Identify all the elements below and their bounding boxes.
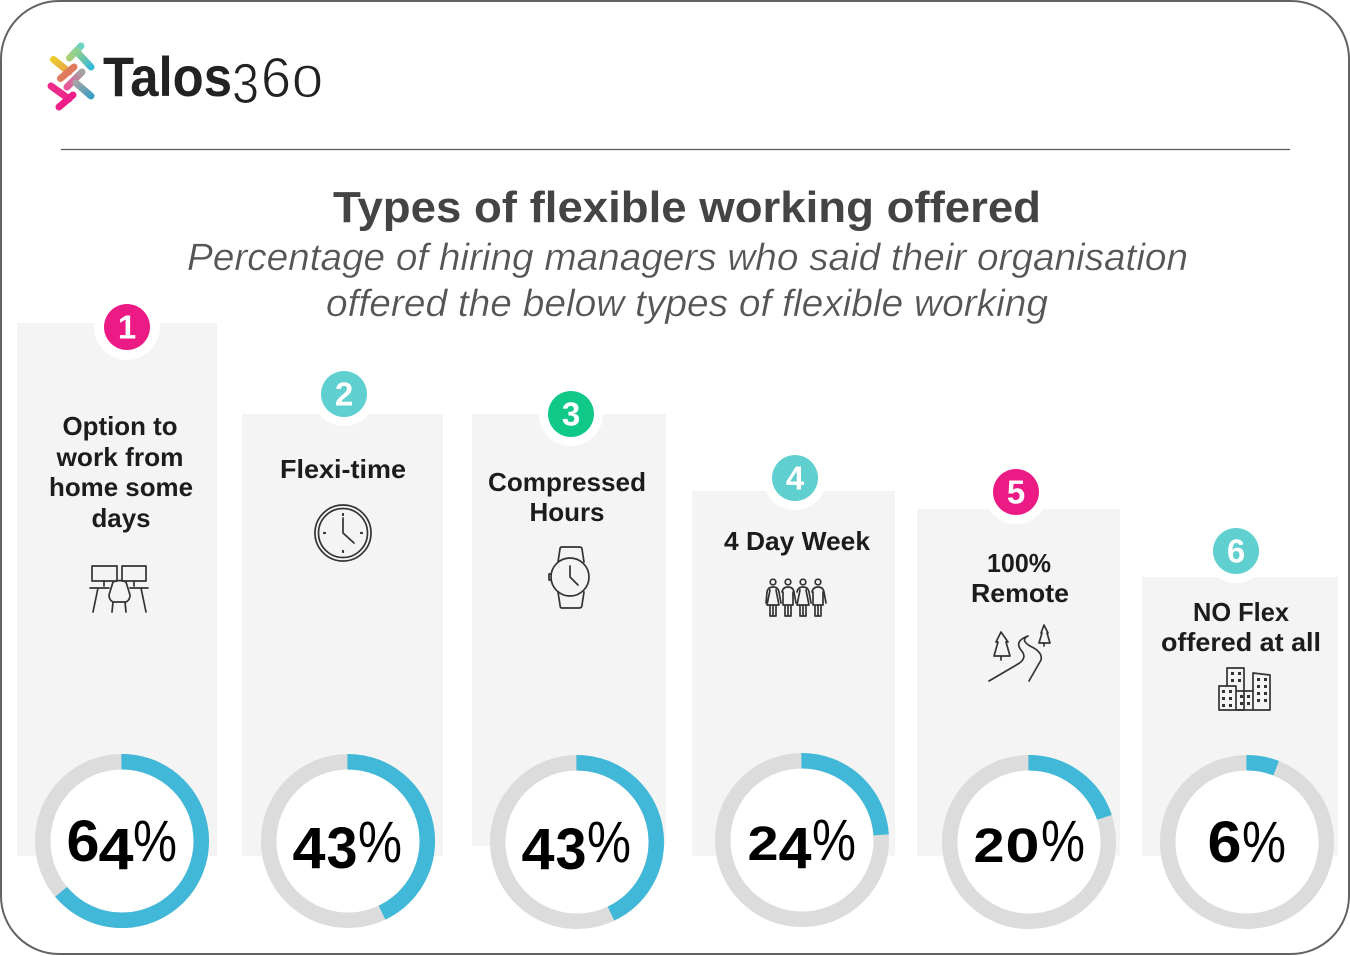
subtitle: Percentage of hiring managers who said their organisation: [187, 237, 1188, 279]
subtitle: [187, 237, 1188, 325]
donut: 43% compressed hours: 3: [556, 817, 586, 882]
icon: wristwatch: [549, 547, 589, 608]
label: compressed hours: Hours: [530, 497, 604, 527]
donut: 6%: %: [1242, 810, 1286, 875]
panel 1: option to work from home: [17, 294, 217, 856]
icon: desks: [90, 566, 148, 612]
panel 2: flexi-time: [242, 362, 443, 856]
icon: office buildings: [1219, 668, 1270, 710]
badge 4: 4: [786, 460, 805, 496]
donut: 43% compressed hours: 4: [522, 817, 554, 882]
badge 2: 2: [335, 376, 353, 412]
label: compressed hours: [488, 467, 646, 527]
label: 100% remote: 100%: [987, 548, 1051, 578]
donut: 43% compressed hours: %: [587, 810, 631, 875]
logo wordmark: Talos: [103, 45, 232, 108]
label: 100% remote: Remote: [971, 578, 1069, 608]
label: 4 day week: 4 Day Week: [724, 526, 871, 556]
donut: 43% compressed hours: [498, 763, 656, 921]
badge 6: 6: [1227, 532, 1245, 570]
badge 1: [94, 294, 160, 360]
panel 6: no flex offered: [1142, 519, 1338, 856]
donut: 6%: 6: [1208, 810, 1242, 875]
donut: 43% flexi-time: 3: [326, 816, 358, 881]
logo wordmark: 0: [292, 56, 323, 107]
label: option to work from home some days: [49, 411, 193, 533]
title: Types of flexible working offered: [333, 183, 1041, 232]
donut: 64%: 4: [98, 817, 134, 882]
panel 4: 4 day week: [692, 446, 895, 856]
label: no flex offered at all: [1161, 597, 1321, 657]
badge 1: 1: [118, 308, 136, 346]
donut: 64%: %: [133, 809, 177, 874]
panel 5: 100% remote: [917, 460, 1120, 856]
logo wordmark: 6: [261, 46, 291, 110]
donut: 24%: [723, 761, 881, 919]
logo wordmark: [103, 45, 323, 116]
icon: road and trees: [989, 625, 1050, 681]
donut: 64%: 6: [66, 809, 100, 874]
donut: 43% flexi-time: %: [358, 810, 402, 875]
donut: 20%: %: [1041, 809, 1085, 874]
badge 4: [763, 446, 827, 510]
donut: 24%: 4: [778, 816, 812, 881]
badge 2: [312, 362, 376, 426]
label: option to work from home some days: home some: [49, 472, 193, 502]
donut: 24%: %: [812, 808, 856, 873]
donut: 20%: 0: [1006, 820, 1040, 873]
icon: logo mark: [51, 46, 91, 107]
icon: four people: [766, 579, 826, 616]
label: option to work from home some days: days: [92, 503, 150, 533]
badge 3: [539, 382, 603, 446]
label: option to work from home some days: work from: [55, 442, 183, 472]
donut: 24%: 2: [748, 818, 778, 871]
donut: 43% flexi-time: [269, 762, 427, 920]
logo: Talos360: [51, 45, 323, 116]
label: no flex offered at all: offered at all: [1161, 627, 1321, 657]
donut: 64%: [43, 762, 201, 920]
label: compressed hours: Compressed: [488, 467, 646, 497]
badge 3: 3: [562, 396, 580, 432]
label: no flex offered at all: NO Flex: [1193, 597, 1290, 627]
donut: 20%: 2: [974, 820, 1004, 873]
badge 6: [1204, 519, 1268, 583]
logo wordmark: 3: [232, 52, 259, 116]
badge 5: 5: [1007, 474, 1025, 510]
icon: clock: [315, 505, 371, 561]
label: option to work from home some days: Option to: [62, 411, 178, 441]
label: flexi-time: Flexi-time: [280, 454, 406, 484]
donut: 43% flexi-time: 4: [292, 816, 326, 881]
badge 5: [984, 460, 1048, 524]
subtitle: offered the below types of flexible working: [326, 283, 1048, 325]
label: 100% remote: [971, 548, 1069, 608]
donut: 20%: [950, 763, 1108, 921]
donut: 6%: [1168, 763, 1326, 921]
panel 3: compressed hours: [472, 382, 666, 846]
